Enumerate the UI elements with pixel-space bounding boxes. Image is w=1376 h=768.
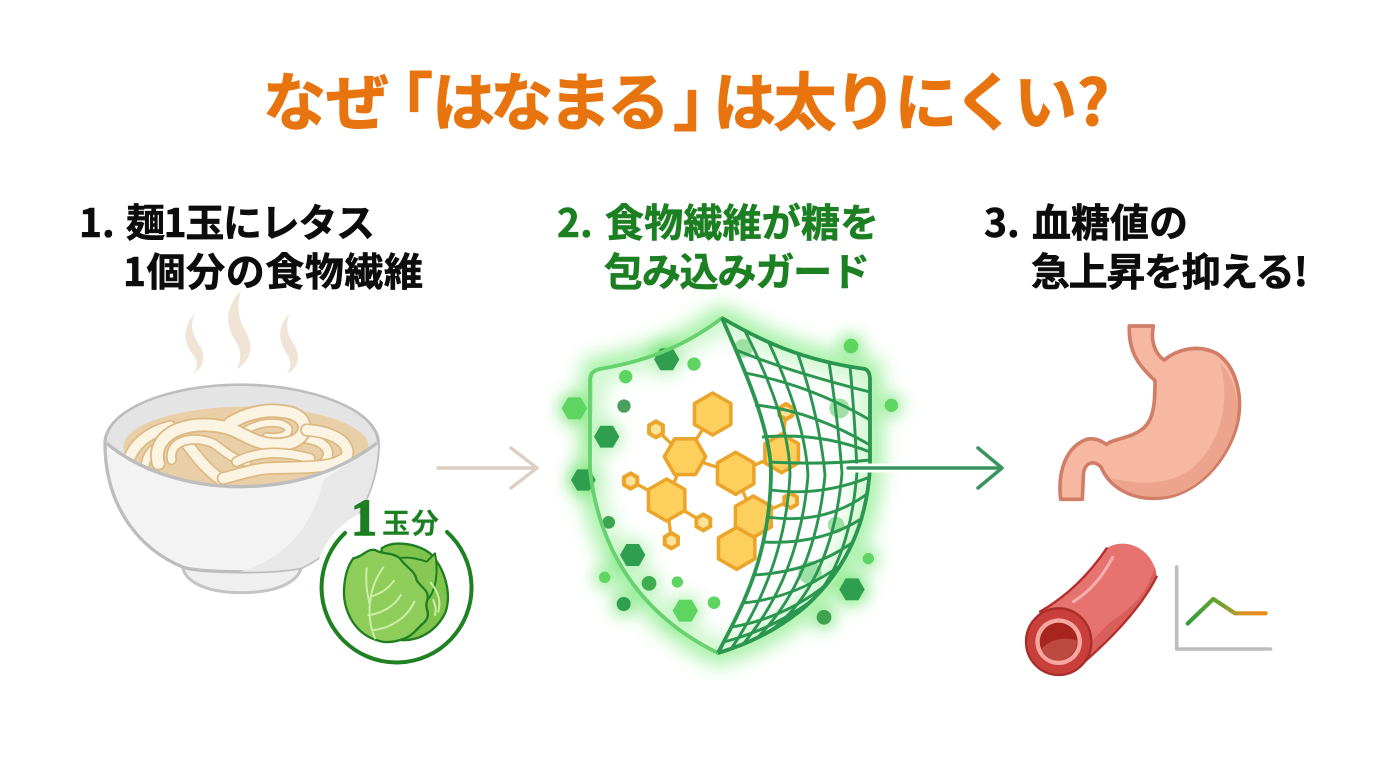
badge ring (322, 532, 472, 662)
heading: step 3 (984, 193, 1308, 298)
badge number: 1 (351, 490, 377, 547)
arrow: shield to stomach and vessel (846, 448, 1002, 488)
badge label: 玉分 (382, 502, 439, 542)
heading: step 3: 血糖値の (1032, 193, 1188, 249)
heading: step 2: 2. (557, 193, 593, 249)
particle glow (560, 336, 901, 627)
heading: step 2 (557, 193, 879, 298)
heading: step 3: 急上昇を抑える! (1031, 242, 1308, 298)
heading: step 1 (79, 193, 423, 298)
title: ? (1077, 53, 1109, 144)
title: はなまる (432, 53, 670, 144)
bowl body (105, 385, 378, 572)
shield right outline (718, 318, 870, 653)
shield left outline (590, 318, 722, 653)
illustration: fiber shield (560, 318, 901, 653)
title: は太りにくい (713, 53, 1077, 144)
bowl shading (240, 443, 378, 573)
icon: lettuce (344, 544, 448, 642)
heading: step 2: 包み込みガード (604, 242, 870, 298)
shield interior (590, 318, 870, 653)
shield glow (590, 318, 870, 653)
chart line (1188, 599, 1266, 624)
heading: step 2: 食物繊維が糖を (605, 193, 879, 249)
heading: step 1: 1. (79, 193, 115, 249)
title: なぜ (263, 53, 389, 144)
badge: one head of lettuce (314, 490, 478, 669)
heading: step 3: 3. (984, 193, 1020, 249)
arrow: bowl to shield (438, 448, 537, 488)
heading: step 1: 1個分の食物繊維 (123, 242, 423, 298)
chart axes (1177, 567, 1270, 649)
icon: stomach (1060, 326, 1239, 499)
soup and noodles (123, 407, 369, 487)
title: 」 (673, 53, 736, 144)
illustration: udon bowl (105, 291, 378, 593)
bowl inner rim (107, 386, 377, 487)
fiber particles (562, 339, 898, 625)
molecule (624, 393, 798, 569)
icon: blood vessel (1026, 544, 1157, 675)
shield fiber net (724, 331, 870, 649)
title: 「 (370, 53, 433, 144)
bowl foot (183, 563, 302, 593)
chart: blood sugar curve (1177, 567, 1270, 649)
badge white backing (314, 505, 478, 669)
bowl rim line (107, 443, 377, 487)
heading: step 1: 麺1玉にレタス (126, 193, 375, 249)
icon: steam (185, 291, 298, 374)
title (263, 53, 1109, 144)
